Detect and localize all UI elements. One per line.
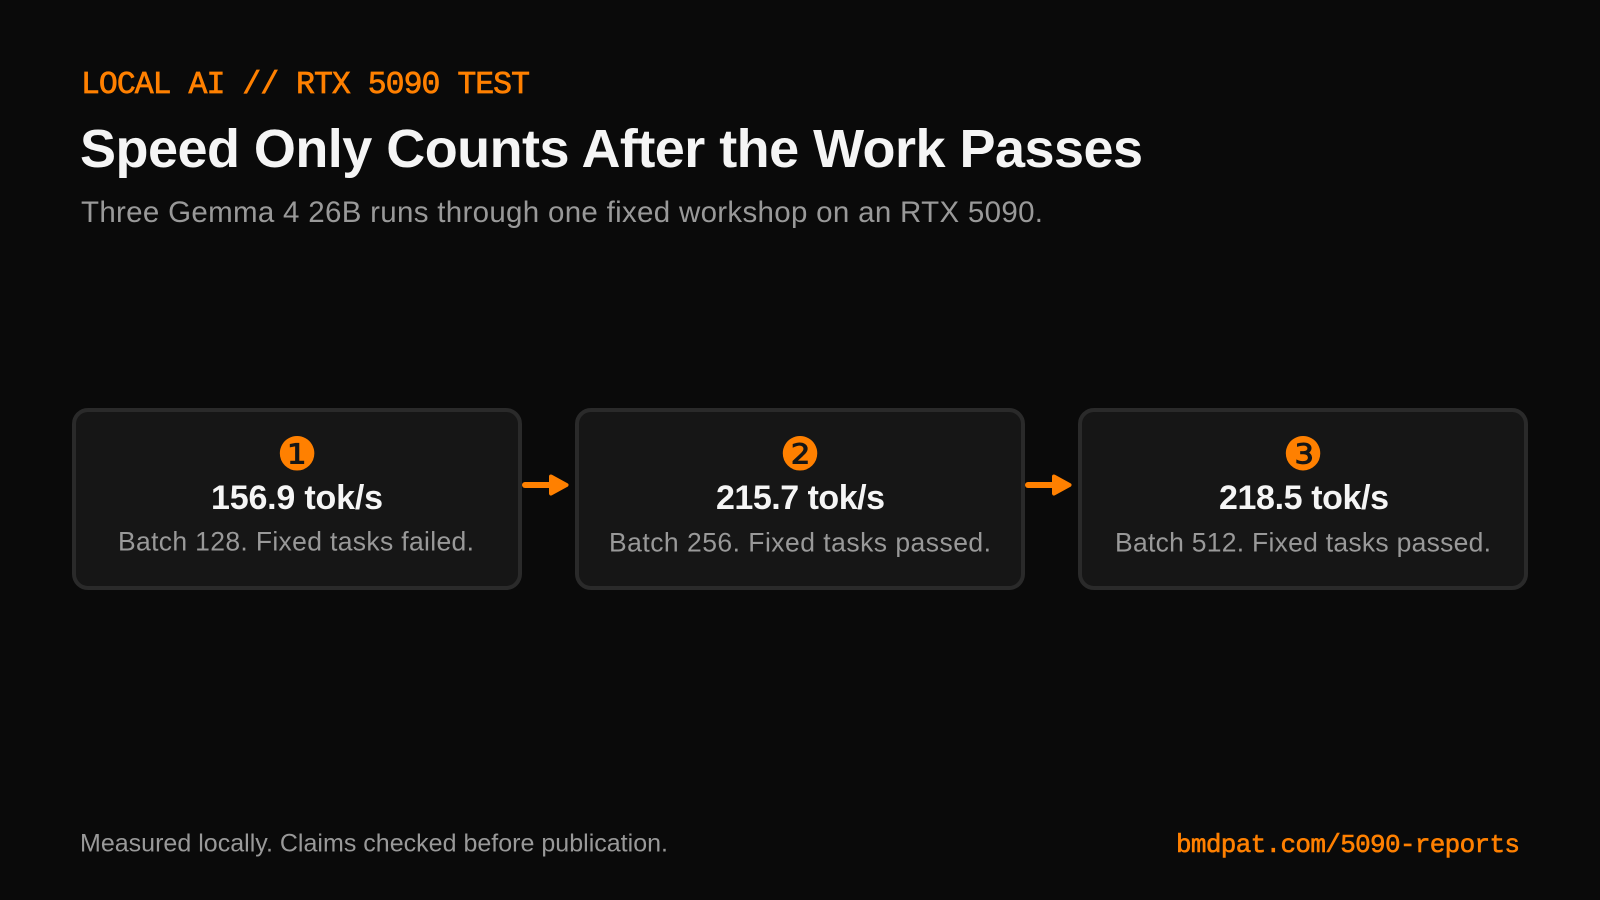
metric 1: 156.9 tok/s (211, 479, 383, 517)
footer note: Measured locally. Claims checked before publication. (80, 830, 668, 858)
step number 3: ❸ (1282, 427, 1324, 481)
card background 2 (577, 410, 1023, 588)
description 3: Batch 512. Fixed tasks passed. (1115, 528, 1491, 558)
card background 1 (74, 410, 520, 588)
metric 3: 218.5 tok/s (1219, 479, 1389, 517)
panel: step 3 (1080, 410, 1526, 588)
step number 1: ❶ (276, 427, 318, 481)
metric 2: 215.7 tok/s (716, 479, 885, 517)
description 2: Batch 256. Fixed tasks passed. (609, 528, 991, 558)
description 1: Batch 128. Fixed tasks failed. (118, 526, 474, 556)
arrow 1 to 2 (525, 476, 566, 494)
title: Speed Only Counts After the Work Passes (80, 119, 1143, 179)
eyebrow label: LOCAL AI // RTX 5090 TEST (81, 68, 530, 103)
panel: step 1 (74, 410, 520, 588)
arrow 2 to 3 (1028, 476, 1070, 494)
step number 2: ❷ (779, 427, 821, 481)
card background 3 (1080, 410, 1526, 588)
footer link: bmdpat.com/5090-reports (1176, 830, 1520, 860)
panel: step 2 (577, 410, 1023, 588)
subtitle: Three Gemma 4 26B runs through one fixed workshop on an RTX 5090. (81, 196, 1043, 229)
